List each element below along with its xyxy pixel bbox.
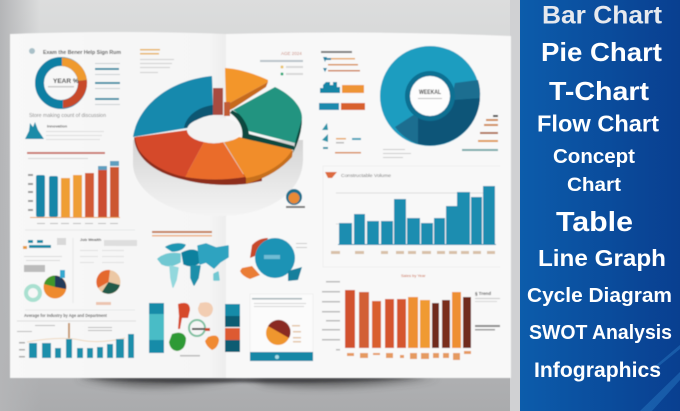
divider card: pies — [23, 230, 137, 310]
page: left — [10, 32, 226, 378]
small icon column — [322, 123, 361, 154]
chart title — [27, 152, 105, 159]
list of chart names: Concept — [553, 146, 635, 168]
bar chart: multicolour — [28, 161, 120, 224]
small orange badge — [286, 189, 305, 208]
big 3D pie chart — [133, 68, 303, 216]
world map — [158, 244, 228, 287]
donut side labels — [383, 115, 498, 158]
big blue donut chart: WEEKAL — [419, 90, 441, 96]
left page heading: Exam the Bener Help Sign Rum — [43, 50, 121, 56]
contact shadow — [80, 378, 425, 382]
right chart title — [325, 172, 392, 178]
teal icon — [25, 122, 44, 139]
inner wall blue — [184, 105, 213, 128]
list of chart names — [527, 2, 672, 382]
bottom bar chart — [17, 313, 136, 358]
dark slice edges — [134, 137, 262, 185]
map panel — [152, 231, 228, 287]
ring: pale teal — [26, 286, 40, 300]
list of chart names: T-Chart — [549, 76, 649, 106]
back walls — [213, 88, 223, 115]
list of chart names: SWOT Analysis — [529, 322, 672, 344]
list of chart names: Flow Chart — [537, 110, 659, 136]
decorative corner streaks — [640, 345, 680, 411]
orange chart title: Sales by Year — [401, 273, 426, 278]
orange note — [140, 49, 174, 73]
orange top slice — [225, 68, 268, 105]
list of chart names: Table — [556, 206, 633, 237]
small donut block: YEAR % — [53, 78, 79, 85]
text block: Innovation — [47, 124, 68, 128]
panel: chart types — [520, 0, 680, 411]
pie: peach: Job Wealth — [80, 237, 102, 242]
heading icon — [29, 48, 35, 54]
list of chart names: Pie Chart — [541, 37, 662, 67]
list of chart names: Chart — [567, 175, 622, 196]
red slice — [135, 130, 204, 177]
arrows list — [321, 51, 360, 72]
legend top center: AGE 2024 — [281, 51, 302, 56]
bottom pie card — [250, 294, 313, 361]
orange slice edge — [246, 150, 293, 184]
background — [0, 0, 520, 411]
bottom bar chart: Average for Industry by Age and Department — [24, 313, 108, 318]
brochure spread — [10, 32, 511, 378]
orange slice — [185, 142, 245, 180]
blue circle diagram — [240, 238, 307, 281]
center hole — [187, 117, 241, 143]
flow diagram — [149, 302, 240, 356]
page: right — [226, 32, 511, 378]
right notes: § Trend — [475, 291, 491, 296]
amber slice — [224, 137, 293, 178]
legend list — [95, 63, 120, 105]
bar chart: orange — [322, 281, 471, 360]
pie: green orange — [44, 276, 66, 298]
right notes — [475, 291, 500, 330]
white cylinder base — [133, 140, 303, 216]
right chart title: Constructable Volume — [341, 173, 392, 178]
list of chart names: Infographics — [534, 359, 661, 382]
teal slice — [133, 76, 213, 137]
legend top center — [260, 51, 303, 76]
right chart frame — [323, 166, 500, 267]
list of chart names: Line Graph — [538, 245, 666, 271]
brochure shadow — [75, 378, 440, 387]
list of chart names: Bar Chart — [542, 2, 663, 30]
big blue donut chart — [380, 46, 480, 146]
green slice — [233, 87, 302, 143]
subheading: Store making count of discussion — [29, 113, 106, 119]
small donut block — [40, 58, 87, 108]
teal mini bars with labels — [319, 82, 365, 110]
text block — [46, 124, 104, 140]
list of chart names: Cycle Diagram — [527, 285, 672, 307]
bar chart: blue — [331, 186, 496, 254]
